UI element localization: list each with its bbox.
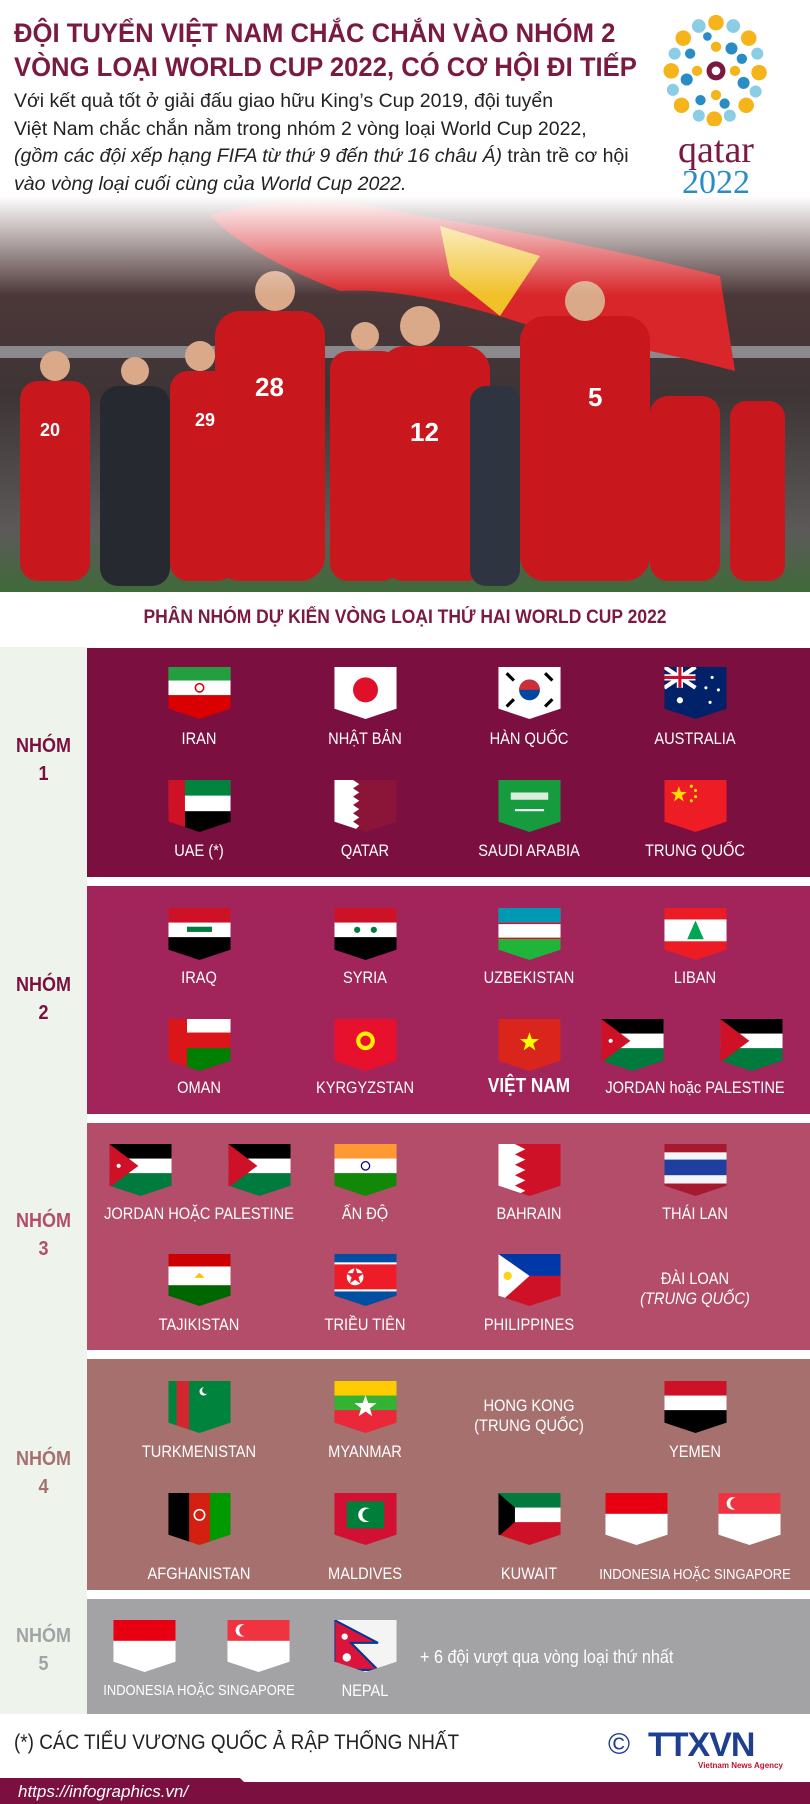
- label: Qatar: QATAR: [341, 841, 389, 860]
- flag: Bahrain: [498, 1144, 560, 1196]
- flag: China: [664, 780, 726, 832]
- flag: Singapore (group 5): [227, 1620, 290, 1672]
- label: Syria: SYRIA: [343, 968, 387, 987]
- flag: Maldives: [334, 1493, 396, 1545]
- panel: group 4: [87, 1359, 810, 1590]
- group label 4: NHÓM: [16, 1448, 71, 1470]
- label: Korea: HÀN QUỐC: [490, 729, 568, 748]
- label: Iran: IRAN: [182, 729, 216, 748]
- panel: group 3: [87, 1123, 810, 1350]
- flag: Philippines: [498, 1254, 561, 1306]
- flag: Kuwait: [498, 1493, 560, 1545]
- panel: group 2: [87, 886, 810, 1114]
- group label 5: [16, 1624, 71, 1675]
- flag: Syria: [334, 908, 397, 960]
- label: Kuwait: KUWAIT: [501, 1564, 557, 1583]
- footer bar: https://infographics.vn/: [18, 1782, 188, 1801]
- footer bar: [0, 1778, 810, 1804]
- flag: Japan: [334, 667, 397, 719]
- label: Uzbekistan: UZBEKISTAN: [484, 968, 574, 987]
- flag: Palestine: [720, 1019, 783, 1071]
- flag: Tajikistan: [168, 1254, 231, 1306]
- flag: Indonesia (group 5): [113, 1620, 176, 1672]
- flag: Turkmenistan: [168, 1381, 231, 1433]
- group label 2: NHÓM: [16, 974, 71, 996]
- intro text: (gồm các đội xếp hạng FIFA từ thứ 9 đến thứ 16 châu Á) tràn trề cơ hội: [14, 145, 629, 167]
- label: Taiwan: [640, 1269, 750, 1308]
- label: Vietnam: VIỆT NAM: [488, 1075, 570, 1097]
- label: Afghanistan: AFGHANISTAN: [148, 1564, 250, 1583]
- label: Thailand: THÁI LAN: [662, 1204, 728, 1223]
- flag: Uzbekistan: [498, 908, 561, 960]
- flag: Thailand: [664, 1144, 726, 1196]
- logo: qatar 2022: [663, 14, 767, 201]
- flag: UAE: [168, 780, 231, 832]
- label: Tajikistan: TAJIKISTAN: [159, 1315, 239, 1334]
- intro text: vào vòng loại cuối cùng của World Cup 2022.: [14, 172, 406, 194]
- label: Kyrgyzstan: KYRGYZSTAN: [316, 1078, 414, 1097]
- logo: qatar 2022: qatar: [678, 129, 754, 171]
- logo: TTXVN: ©: [608, 1728, 630, 1761]
- label: Jordan or Palestine: JORDAN HOẶC PALESTINE: [104, 1204, 294, 1223]
- group label 1: NHÓM: [16, 735, 71, 757]
- label: Philippines: PHILIPPINES: [484, 1315, 574, 1334]
- flag: Jordan: [601, 1019, 664, 1071]
- flag: Korea: [498, 667, 561, 719]
- footnote: (*) CÁC TIỂU VƯƠNG QUỐC Ả RẬP THỐNG NHẤT: [14, 1731, 459, 1754]
- flag: Yemen: [664, 1381, 727, 1433]
- label: Hong Kong: (TRUNG QUỐC): [474, 1416, 584, 1435]
- label: Nepal: NEPAL: [342, 1681, 388, 1700]
- flag: India: [334, 1144, 397, 1196]
- label: China: TRUNG QUỐC: [645, 841, 745, 860]
- label: Indonesia or Singapore: INDONESIA HOẶC SINGAPORE: [103, 1682, 295, 1699]
- title: ĐỘI TUYỂN VIỆT NAM CHẮC CHẮN VÀO NHÓM 2: [14, 18, 615, 48]
- label: Yemen: YEMEN: [669, 1442, 721, 1461]
- group label 3: 3: [38, 1238, 49, 1260]
- flag: Saudi Arabia: [498, 780, 561, 832]
- group label 4: 4: [38, 1476, 49, 1498]
- photo: team celebrating: [0, 200, 810, 592]
- intro text: Với kết quả tốt ở giải đấu giao hữu King’s Cup 2019, đội tuyển: [14, 90, 553, 112]
- left column background: [0, 647, 87, 1714]
- intro text: [14, 90, 629, 194]
- group label 5: 5: [38, 1653, 49, 1675]
- logo: qatar 2022: 2022: [682, 164, 750, 201]
- label: Bahrain: BAHRAIN: [496, 1204, 561, 1223]
- label: Hong Kong: HONG KONG: [484, 1396, 574, 1415]
- flag: Kyrgyzstan: [334, 1019, 396, 1071]
- label: Australia: AUSTRALIA: [654, 729, 736, 748]
- group label 2: [16, 972, 71, 1024]
- panel: group 1: [87, 648, 810, 877]
- label: Turkmenistan: TURKMENISTAN: [142, 1442, 256, 1461]
- label: Japan: NHẬT BẢN: [328, 729, 402, 748]
- panel: group 5: [87, 1599, 810, 1714]
- flag: Afghanistan: [168, 1493, 231, 1545]
- group label 1: [16, 734, 71, 785]
- photo: team celebrating: 12: [410, 417, 439, 447]
- group label 3: NHÓM: [16, 1210, 71, 1232]
- photo: team celebrating: 5: [588, 382, 602, 412]
- label: Lebanon: LIBAN: [674, 968, 716, 987]
- title: [14, 18, 637, 82]
- flag: Oman: [168, 1019, 231, 1071]
- label: Indonesia or Singapore: INDONESIA HOẶC SINGAPORE: [599, 1566, 791, 1583]
- flag: North Korea: [334, 1254, 397, 1306]
- flag: Myanmar: [334, 1381, 397, 1433]
- photo: team celebrating: 20: [40, 420, 60, 440]
- label: Taiwan: ĐÀI LOAN: [661, 1269, 729, 1288]
- subtitle: PHÂN NHÓM DỰ KIẾN VÒNG LOẠI THỨ HAI WORLD CUP 2022: [143, 607, 667, 628]
- group label 2: 2: [38, 1002, 49, 1024]
- group label 1: 1: [38, 763, 49, 785]
- logo: TTXVN: [608, 1726, 783, 1770]
- logo: TTXVN: TTXVN: [648, 1726, 754, 1764]
- group label 5: NHÓM: [16, 1625, 71, 1647]
- flag: Iraq: [168, 908, 231, 960]
- title: VÒNG LOẠI WORLD CUP 2022, CÓ CƠ HỘI ĐI TIẾP: [14, 52, 637, 82]
- flag: Australia: [664, 667, 726, 719]
- group label 4: [16, 1446, 71, 1498]
- label: Saudi Arabia: SAUDI ARABIA: [478, 841, 580, 860]
- photo: team celebrating: 29: [195, 410, 215, 430]
- label: UAE: UAE (*): [174, 841, 224, 860]
- flag: Lebanon: [664, 908, 727, 960]
- flag: Nepal: [334, 1620, 396, 1672]
- label: Oman: OMAN: [177, 1078, 221, 1097]
- group label 3: [16, 1208, 71, 1260]
- flag: Jordan (group 3): [109, 1144, 172, 1196]
- label: Iraq: IRAQ: [181, 968, 217, 987]
- label: Jordan or Palestine: JORDAN hoặc PALESTINE: [605, 1078, 785, 1097]
- label: India: ẤN ĐỘ: [342, 1204, 388, 1223]
- logo: TTXVN: Vietnam News Agency: [698, 1761, 783, 1770]
- flag: Indonesia: [605, 1493, 668, 1545]
- label: Hong Kong: [474, 1396, 584, 1435]
- flag: Qatar: [334, 780, 396, 832]
- flag: Palestine (group 3): [228, 1144, 291, 1196]
- text: plus 6 teams: + 6 đội vượt qua vòng loại thứ nhất: [420, 1647, 673, 1667]
- photo: team celebrating: 28: [255, 372, 284, 402]
- label: Taiwan: (TRUNG QUỐC): [640, 1289, 750, 1308]
- label: North Korea: TRIỀU TIÊN: [325, 1315, 405, 1334]
- flag: Singapore: [718, 1493, 781, 1545]
- label: Maldives: MALDIVES: [328, 1564, 402, 1583]
- flag: Iran: [168, 667, 231, 719]
- label: Myanmar: MYANMAR: [328, 1442, 402, 1461]
- flag: Vietnam: [498, 1019, 560, 1071]
- intro text: Việt Nam chắc chắn nằm trong nhóm 2 vòng loại World Cup 2022,: [14, 118, 587, 140]
